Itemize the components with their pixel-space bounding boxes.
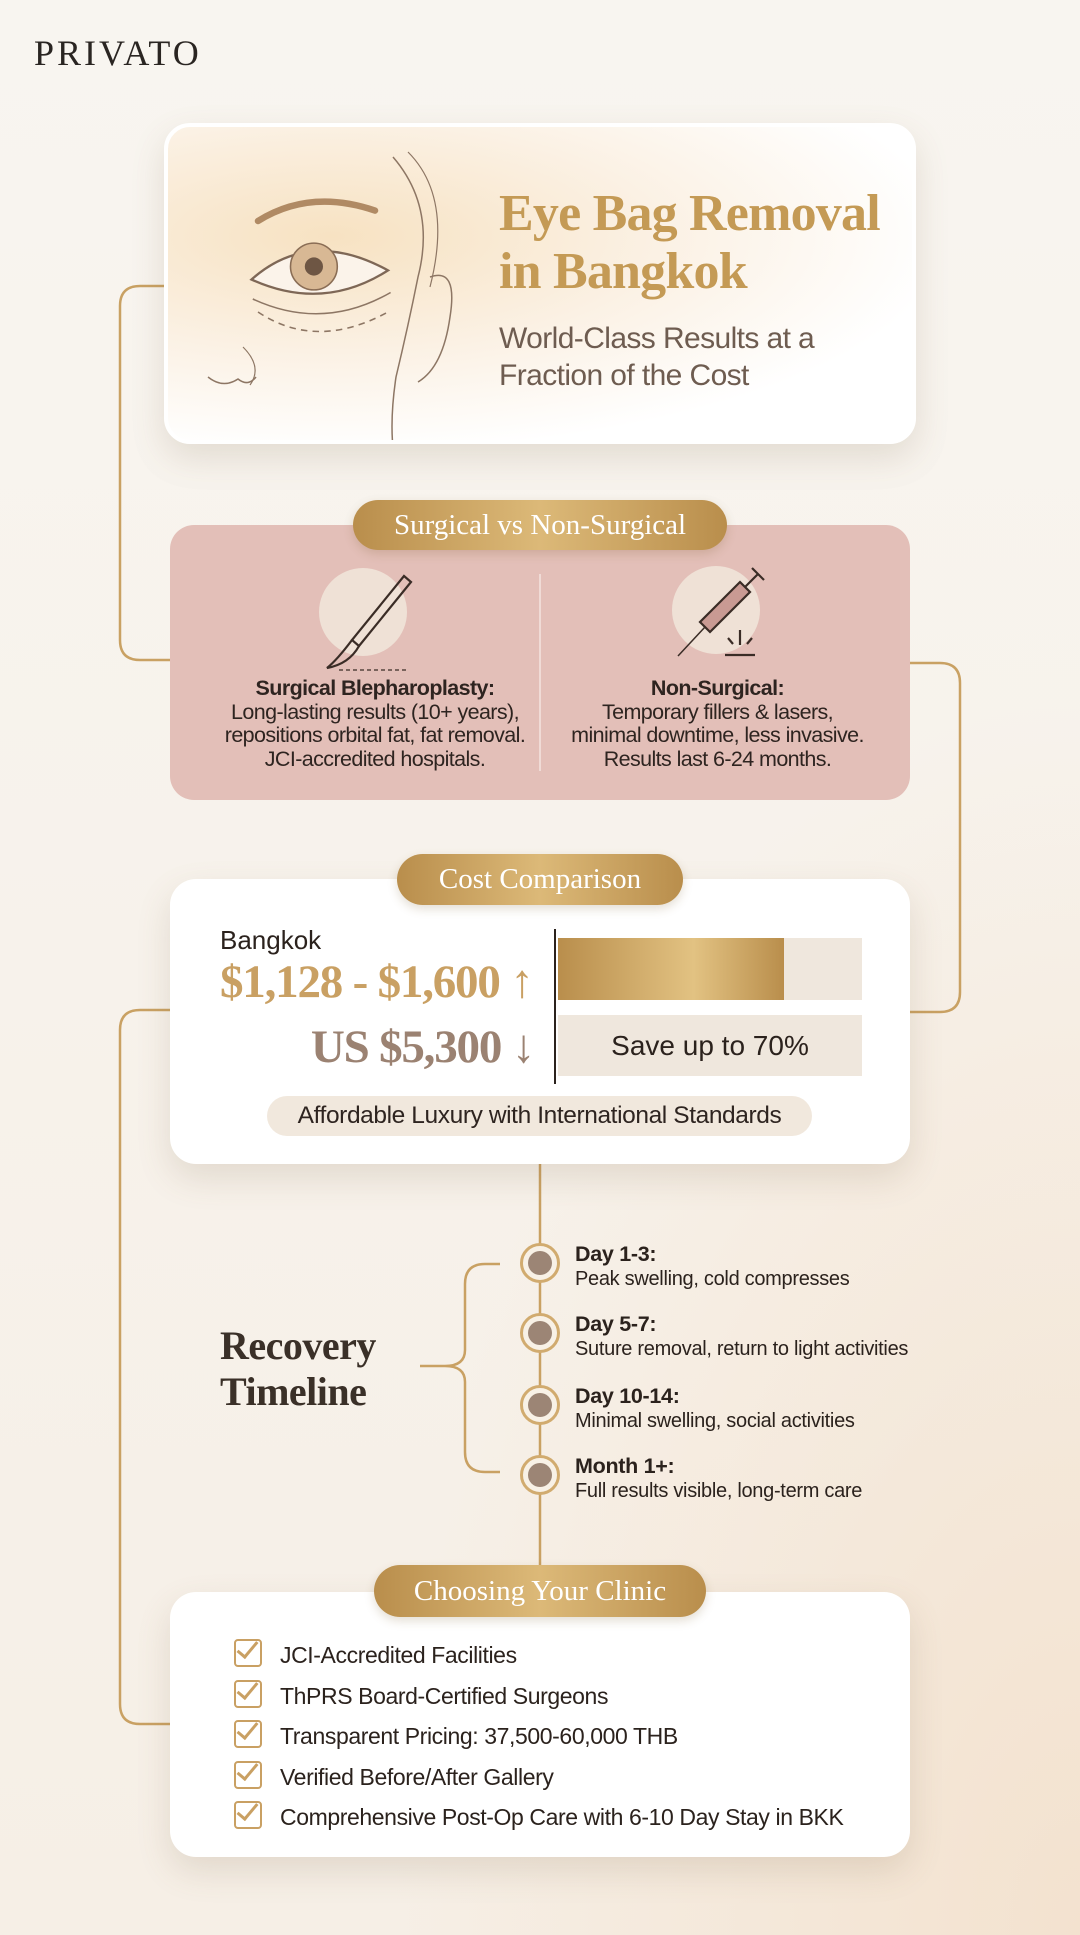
illustration: face with eye: [208, 152, 452, 440]
text: non-surgical: [571, 676, 864, 770]
panel: cost comparison: Bangkok: [220, 925, 321, 955]
timeline item 2: [520, 1312, 908, 1360]
timeline item 3: [520, 1384, 855, 1432]
panel: cost comparison: [170, 879, 910, 1164]
timeline item 1: [520, 1242, 849, 1290]
heading: recovery timeline: [220, 1323, 376, 1414]
timeline item 4: Full results visible, long-term care: [575, 1480, 862, 1502]
tagline: Affordable Luxury with International Standards: [298, 1102, 781, 1129]
price bangkok: $1,128 - $1,600 ↑: [220, 954, 533, 1008]
recovery timeline: [220, 1262, 500, 1474]
savings bar: [558, 1015, 862, 1076]
checklist: Verified Before/After Gallery: [280, 1764, 553, 1790]
subtitle: Fraction of the Cost: [499, 359, 749, 392]
text: surgical: [225, 676, 525, 770]
text: surgical: Surgical Blepharoplasty:: [256, 676, 494, 700]
icon: scalpel: [319, 568, 412, 671]
heading pill: surgical vs non-surgical: Surgical vs Non-Surgical: [394, 509, 686, 541]
text: non-surgical: Non-Surgical:: [651, 676, 784, 700]
timeline item 4: [520, 1454, 862, 1502]
subtitle: [499, 322, 815, 392]
checklist: [234, 1639, 844, 1830]
title: [499, 185, 880, 300]
bar chart: [558, 938, 862, 1000]
brace: [420, 1262, 500, 1474]
logo: PRIVATO: [34, 33, 202, 73]
timeline item 1: Day 1-3:: [575, 1242, 656, 1266]
icon: syringe: [672, 566, 765, 656]
text: surgical: repositions orbital fat, fat removal.: [225, 723, 525, 747]
checklist: Transparent Pricing: 37,500-60,000 THB: [280, 1723, 678, 1749]
panel: surgical vs non-surgical: [170, 525, 910, 800]
heading pill: surgical vs non-surgical: [353, 500, 727, 550]
checklist: ThPRS Board-Certified Surgeons: [280, 1683, 608, 1709]
timeline item 4: Month 1+:: [575, 1454, 674, 1478]
text: surgical: JCI-accredited hospitals.: [265, 746, 485, 770]
text: non-surgical: minimal downtime, less invasive.: [571, 723, 864, 747]
title: Eye Bag Removal: [499, 185, 880, 242]
heading pill: cost comparison: [397, 854, 683, 905]
subtitle: World-Class Results at a: [499, 322, 814, 355]
timeline item 3: Day 10-14:: [575, 1384, 680, 1408]
tagline: [267, 1096, 812, 1136]
timeline item 2: Suture removal, return to light activities: [575, 1338, 908, 1360]
checklist: JCI-Accredited Facilities: [280, 1642, 517, 1668]
savings bar: Save up to 70%: [611, 1030, 809, 1061]
heading: recovery timeline: Recovery: [220, 1323, 376, 1368]
hero card: [164, 123, 916, 444]
heading pill: choosing your clinic: [374, 1565, 706, 1617]
timeline item 3: Minimal swelling, social activities: [575, 1410, 855, 1432]
timeline item 1: Peak swelling, cold compresses: [575, 1268, 849, 1290]
heading pill: cost comparison: Cost Comparison: [439, 863, 641, 895]
price US: US $5,300 ↓: [311, 1019, 534, 1073]
text: non-surgical: Results last 6-24 months.: [604, 746, 831, 770]
timeline item 2: Day 5-7:: [575, 1312, 656, 1336]
heading: recovery timeline: Timeline: [220, 1369, 366, 1414]
text: non-surgical: Temporary fillers & lasers,: [602, 700, 833, 724]
checklist: Comprehensive Post-Op Care with 6-10 Day Stay in BKK: [280, 1804, 843, 1830]
text: surgical: Long-lasting results (10+ years),: [231, 700, 519, 724]
title: in Bangkok: [499, 243, 747, 300]
panel: choosing your clinic: [170, 1592, 910, 1857]
heading pill: choosing your clinic: Choosing Your Clinic: [414, 1575, 666, 1607]
